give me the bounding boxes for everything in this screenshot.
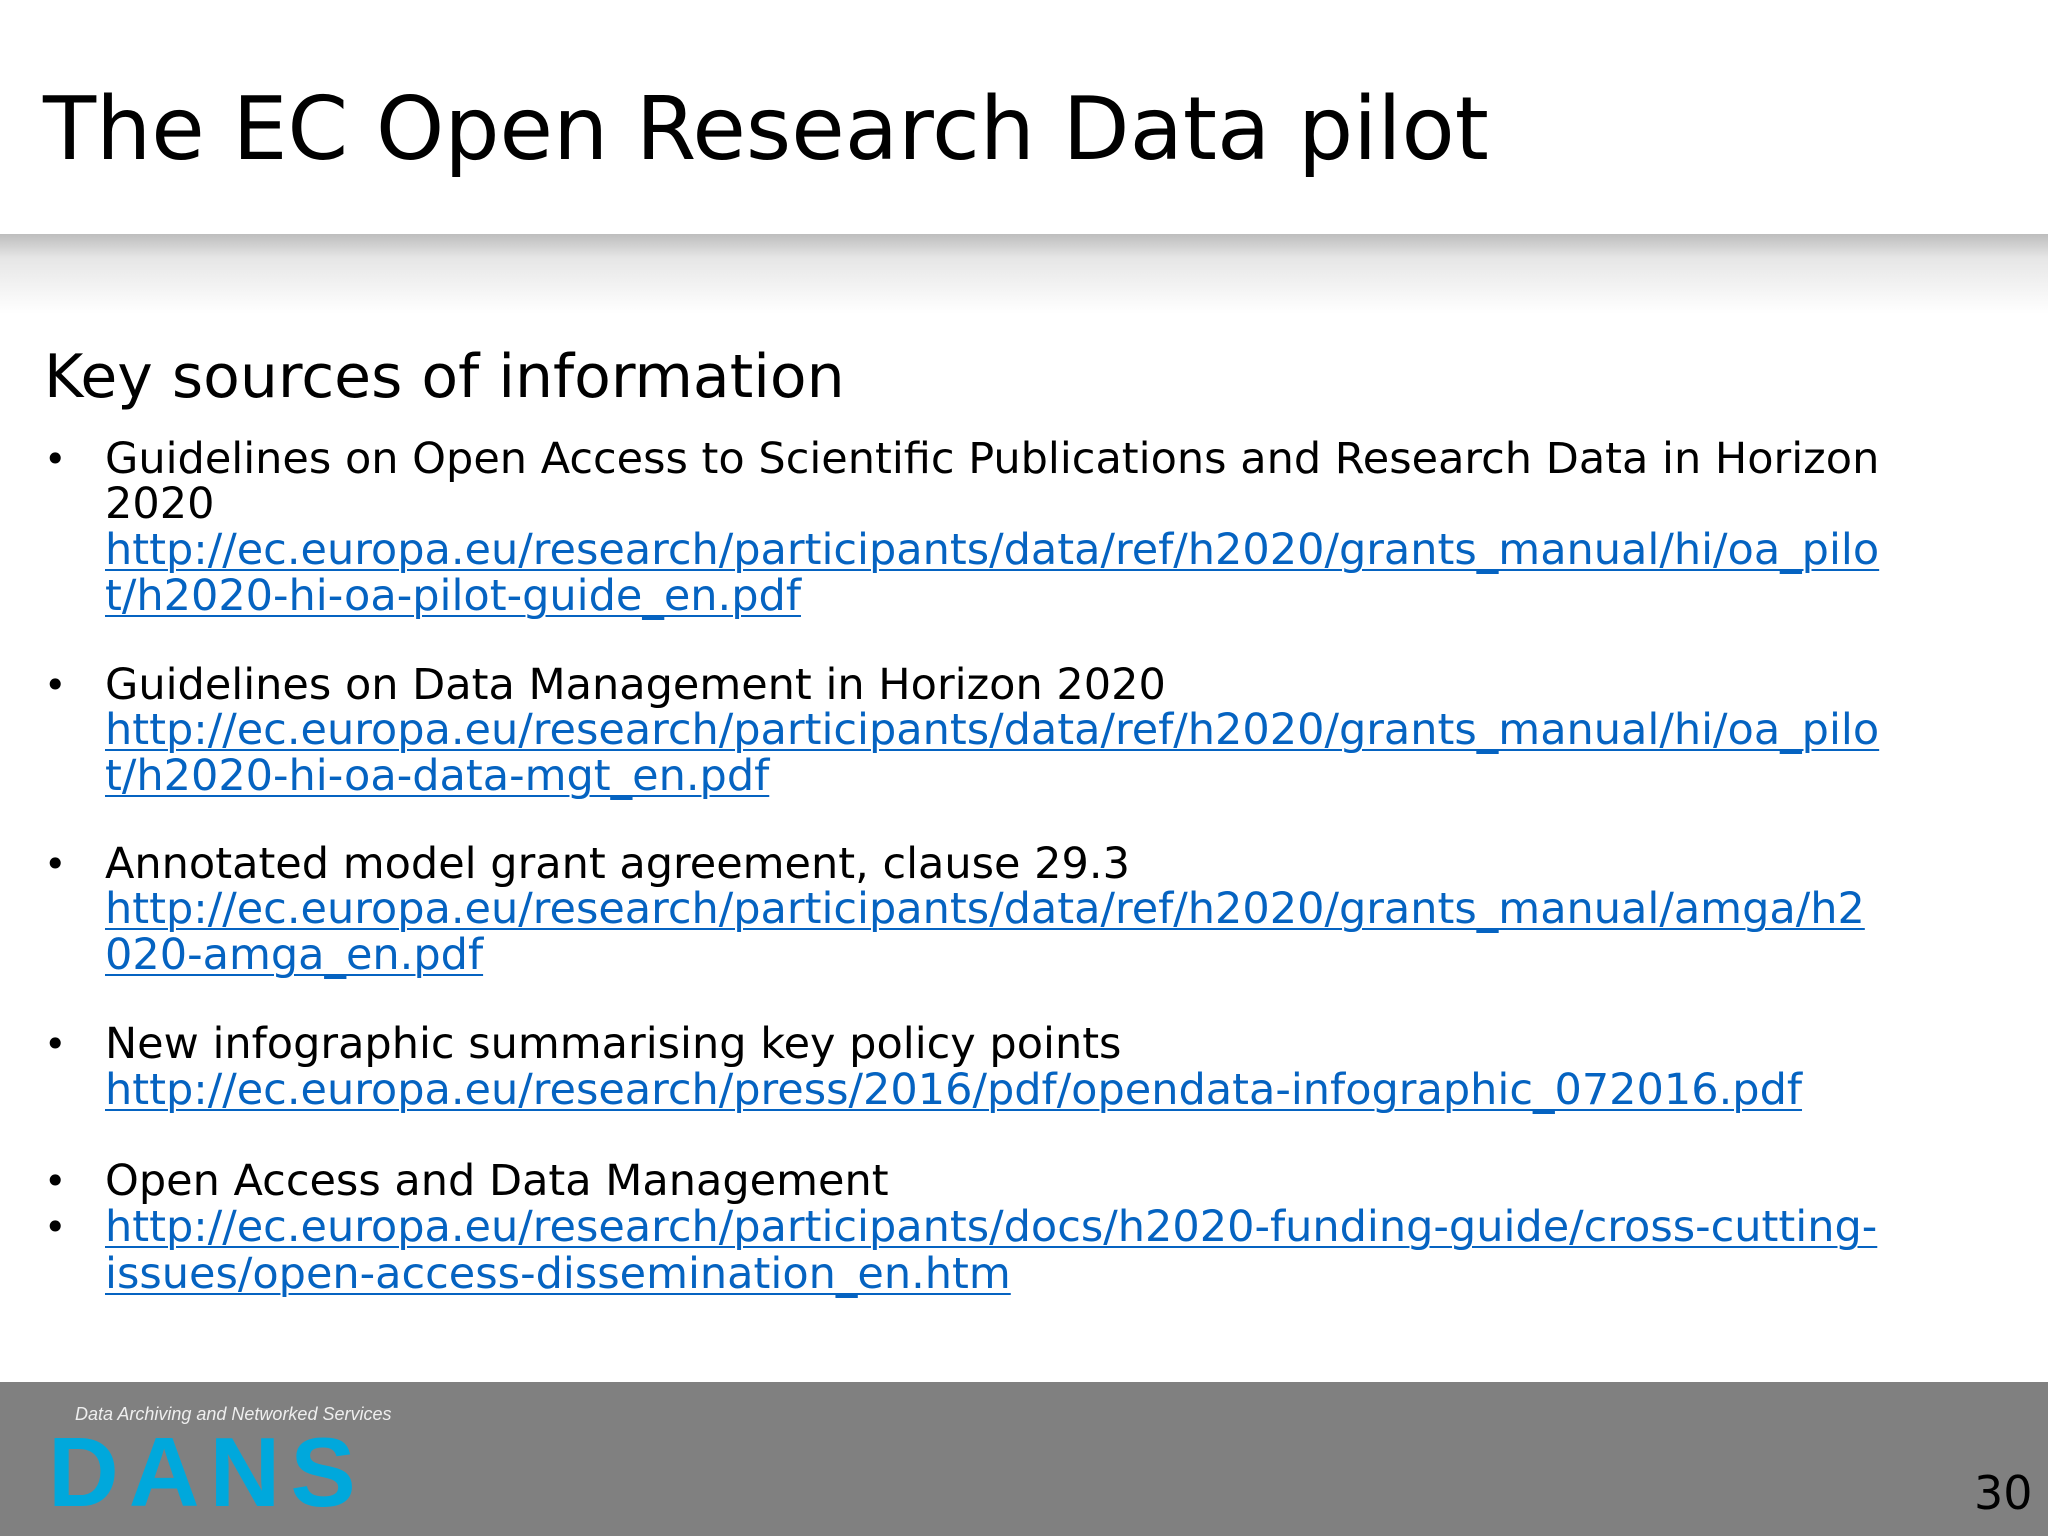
bullet 5: issues/open-access-dissemination_en.htm [105, 1249, 1011, 1299]
bullet 2: http://ec.europa.eu/research/participants/data/ref/h2020/grants_manual/hi/oa_pilo [105, 705, 1879, 755]
bullet 3 [44, 839, 1865, 980]
bullet 5 [44, 1156, 1878, 1299]
subheading: Key sources of information [44, 342, 845, 412]
bullet 3: Annotated model grant agreement, clause 29.3 [105, 839, 1130, 889]
shadow band [0, 234, 2048, 314]
bullet 1: Guidelines on Open Access to Scientific Publications and Research Data in Horizon [105, 434, 1879, 484]
bullet 5: http://ec.europa.eu/research/participants/docs/h2020-funding-guide/cross-cutting- [105, 1202, 1877, 1252]
page number: 30 [1974, 1466, 2033, 1520]
bullet 5: Open Access and Data Management [105, 1156, 889, 1206]
bullet 2: Guidelines on Data Management in Horizon 2020 [105, 660, 1166, 710]
bullet 3: • [44, 842, 66, 886]
bullet 1: 2020 [105, 479, 214, 529]
bullet 4 [44, 1019, 1803, 1115]
bullet 3: 020-amga_en.pdf [105, 930, 483, 980]
logo: DANS [48, 1404, 392, 1527]
logo tagline: Data Archiving and Networked Services [75, 1404, 391, 1424]
footer [0, 1382, 2048, 1536]
bullet 2 [44, 660, 1880, 801]
title: The EC Open Research Data pilot [43, 78, 1489, 180]
bullet 1: t/h2020-hi-oa-pilot-guide_en.pdf [105, 571, 801, 621]
bullet 4: http://ec.europa.eu/research/press/2016/pdf/opendata-infographic_072016.pdf [105, 1065, 1802, 1115]
bullet 1: http://ec.europa.eu/research/participants/data/ref/h2020/grants_manual/hi/oa_pilo [105, 525, 1879, 575]
bullet 5: • [44, 1205, 66, 1249]
bullet 1: • [44, 437, 66, 481]
bullet 3: http://ec.europa.eu/research/participants/data/ref/h2020/grants_manual/amga/h2 [105, 884, 1865, 934]
bullet 1 [44, 434, 1880, 621]
bullet 4: • [44, 1022, 66, 1066]
bullet 2: • [44, 663, 66, 707]
bullet 4: New infographic summarising key policy points [105, 1019, 1121, 1069]
bullet 5: • [44, 1159, 66, 1203]
bullet 2: t/h2020-hi-oa-data-mgt_en.pdf [105, 751, 769, 801]
logo wordmark: DANS [48, 1417, 366, 1527]
